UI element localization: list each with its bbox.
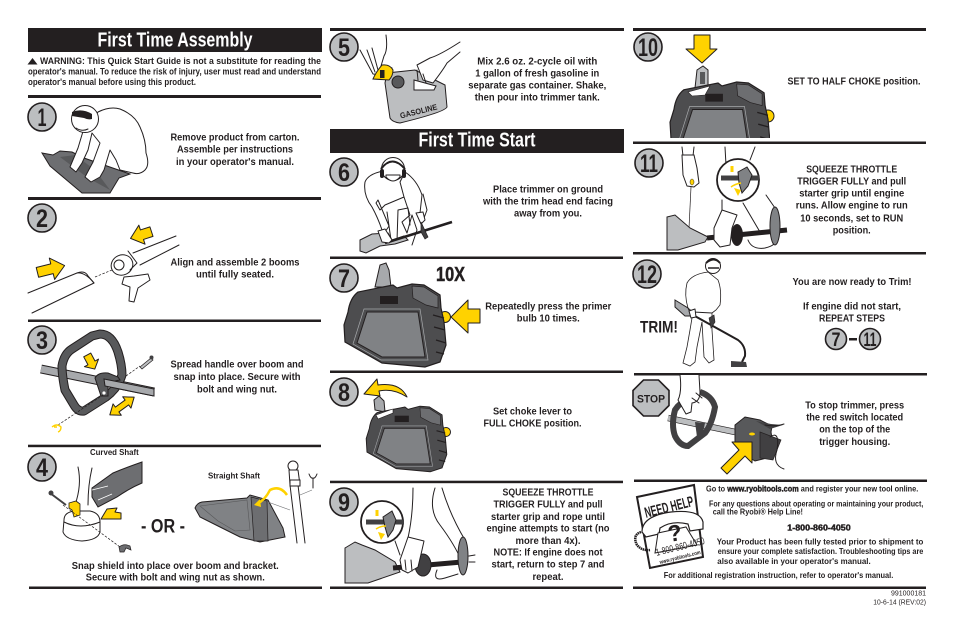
step 9 text: SQUEEZE THROTTLE [502,488,594,499]
step number 5: 5 [338,34,350,62]
step number 7 [330,264,358,293]
step 3 text: bolt and wing nut. [197,385,277,396]
help text: ensure your complete satisfaction. Troubleshooting tips are [718,547,924,556]
step reference: 7 to 11 [826,328,880,351]
help text: For any questions about operating or maintaining your product, [709,500,923,509]
illustration: pulling starter until engine runs [667,147,787,250]
step 2 text [170,258,300,281]
panel: step 8 [330,378,582,472]
step 6 text: with the trim head end facing [482,197,613,208]
step 5 text: then pour into trimmer tank. [475,93,600,104]
illustration: align two booms [28,236,179,313]
step 5 text: separate gas container. Shake, [468,81,606,92]
step 9 text: more than 4x). [516,536,581,547]
step 5 text [468,57,606,104]
step number 6: 6 [338,159,350,187]
step 7 text: Repeatedly press the primer [485,302,611,313]
step 9 text: engine attempts to start (no [486,524,610,535]
icon: need help phone badge: www.ryobitools.com [658,550,701,566]
step 9 text: starter grip and rope until [491,512,605,523]
label: 10X: 10X [436,264,466,286]
step 1 text: in your operator's manual. [176,157,294,168]
step number 6 [330,158,358,187]
step 11 text: starter grip until engine [799,189,904,200]
step 1 text: Assemble per instructions [177,145,293,156]
help text [664,485,924,580]
step reference: 7 to 11: 7 [832,330,840,351]
icon: stop sign [633,380,669,416]
step number 1: 1 [38,104,47,132]
panel: stop [633,375,904,474]
heading: First Time Assembly: First Time Assembly [98,30,253,52]
warning text: operator's manual before using this product. [28,77,196,87]
label: - OR -: - OR - [141,516,185,538]
step 7 text [485,302,611,325]
panel: step 9 [330,488,610,583]
panel: step 2 [28,204,300,313]
step 6 text: Place trimmer on ground [493,185,603,196]
panel: first time start header [330,129,624,153]
warning text [28,56,321,87]
arrow: yellow down into handle [80,351,102,373]
step number 9 [330,488,358,517]
icon: need help phone badge: NEED HELP [643,493,695,522]
panel: step 10 [634,33,921,163]
icon: need help phone badge [635,485,706,568]
step 9 text: NOTE: If engine does not [494,548,603,559]
step number 8: 8 [338,379,350,407]
step 12 text: If engine did not start, [803,302,901,313]
step 5 text: 1 gallon of fresh gasoline in [475,69,599,80]
step 9 text: start, return to step 7 and [492,560,604,571]
step 8 text [484,407,582,430]
step number 9: 9 [338,489,350,517]
step 2 text: until fully seated. [196,270,274,281]
heading bar: First Time Assembly [28,28,322,52]
step 6 text [482,185,613,220]
warning text: operator's manual. To reduce the risk of injury, user must read and understand [28,66,321,76]
stop text: trigger housing. [819,437,890,448]
stop text: To stop trimmer, press [805,401,904,412]
icon: need help phone badge: ? [666,519,683,547]
arrow: right-pointing yellow [35,255,67,283]
step number 11: 11 [640,150,658,178]
arrow: yellow pointing down [686,35,717,63]
step 3 text: Spread handle over boom and [170,360,304,371]
step 4 text: Secure with bolt and wing nut as shown. [86,573,265,584]
step number 5 [330,33,358,62]
step 6 text: away from you. [514,209,582,220]
illustration: person placing trimmer on ground [360,158,452,253]
label: gasoline on can: GASOLINE [399,102,439,120]
panel: step 11 [635,147,908,250]
step number 4: 4 [36,454,48,482]
step number 10: 10 [638,34,658,62]
icon: warning triangle [28,58,38,64]
arrow: left-pointing yellow [127,222,155,248]
step 12 text: You are now ready to Trim! [792,277,912,288]
illustration: primer bulb housing [344,263,450,367]
panel: step 4 [28,448,317,584]
stop text: on the top of the [819,425,890,436]
panel: step 7 [330,263,611,367]
panel: need help [635,485,924,580]
step 9 text [486,488,610,583]
illustration: handle on boom [41,334,154,432]
step number 2 [28,204,56,233]
illustration: straight shaft shield assembly [195,461,317,543]
illustration: person unpacking carton [42,106,148,193]
step 4 text: Snap shield into place over boom and bracket. [72,561,279,572]
step 9 text: repeat. [532,572,564,583]
part number and revision: 991000181 [891,590,926,597]
step 11 text: position. [833,226,871,237]
arrow: curved yellow choke arrow [364,379,407,397]
step 11 text [796,165,908,237]
step 12 text: REPEAT STEPS [819,313,885,324]
illustration: person trimming [675,258,747,367]
arrow: yellow double-headed spread arrow [106,392,138,420]
icon: stop sign: STOP [637,393,665,405]
step 1 text [170,133,300,168]
part number and revision: 10-6-14 (REV:02) [873,600,926,607]
illustration: choke lever housing [366,396,450,472]
step 7 text: bulb 10 times. [517,314,580,325]
label: Curved Shaft: Curved Shaft [90,448,139,457]
panel: step 6 [330,158,613,253]
step 2 text: Align and assemble 2 booms [170,258,300,269]
step 1 text: Remove product from carton. [170,133,300,144]
help text: For additional registration instruction, refer to operator's manual. [664,571,893,580]
label: TRIM!: TRIM! [640,318,678,337]
step number 7: 7 [338,265,350,293]
step 10 text: SET TO HALF CHOKE position. [788,77,921,88]
illustration: half choke housing [670,66,774,163]
arrow: yellow pointing left [101,508,121,519]
help text: Your Product has been fully tested prior to shipment to [717,538,923,547]
step number 4 [28,453,56,482]
help text: 1-800-860-4050 [787,523,851,532]
panel: first time assembly header [28,28,322,87]
panel: step 3 [28,326,304,432]
stop text: the red switch located [806,413,903,424]
help text: Go to www.ryobitools.com and register your new tool online. [706,485,918,494]
step 8 text: FULL CHOKE position. [484,419,582,430]
step 3 text [170,360,304,396]
step 4 text [72,561,279,584]
arrow: yellow pointing at primer bulb [451,300,480,333]
part number and revision [873,590,926,607]
label: Straight Shaft: Straight Shaft [208,472,260,481]
illustration: stop switch on trimmer [668,375,784,469]
step number 1 [28,103,56,132]
heading: First Time Start: First Time Start [418,130,536,152]
help text: call the Ryobi® Help Line! [713,508,803,517]
panel: step 12 [633,258,912,367]
step 8 text: Set choke lever to [493,407,572,418]
step number 8 [330,378,358,407]
step number 3 [28,326,56,355]
panel: step 5 [330,33,606,123]
stop text [805,401,904,448]
step number 3: 3 [36,327,48,355]
heading bar: First Time Start [330,129,624,153]
illustration: curved shaft shield assembly [48,462,142,552]
step 11 text: TRIGGER FULLY and pull [797,177,906,188]
step number 2: 2 [36,205,48,233]
step 11 text: runs. Allow engine to run [796,201,908,212]
step 9 text: TRIGGER FULLY and pull [494,500,603,510]
step 11 text: 10 seconds, set to RUN [800,214,903,225]
warning text: WARNING: This Quick Start Guide is not a substitute for reading the [40,56,321,66]
arrow: large yellow diagonal [721,442,752,474]
step 12 text [792,277,912,324]
illustration: mixing fuel [360,35,460,123]
step 5 text: Mix 2.6 oz. 2-cycle oil with [477,57,597,68]
step 11 text: SQUEEZE THROTTLE [806,165,897,176]
icon: need help phone badge: 1-800-860-4050 [655,536,706,559]
step reference: 7 to 11: 11 [864,330,877,351]
illustration: pulling starter grip [345,488,475,583]
panel: step 1 [28,103,300,193]
step 3 text: snap into place. Secure with [174,372,300,383]
help text: also available in your operator's manual. [717,557,871,566]
step number 12: 12 [637,261,657,289]
